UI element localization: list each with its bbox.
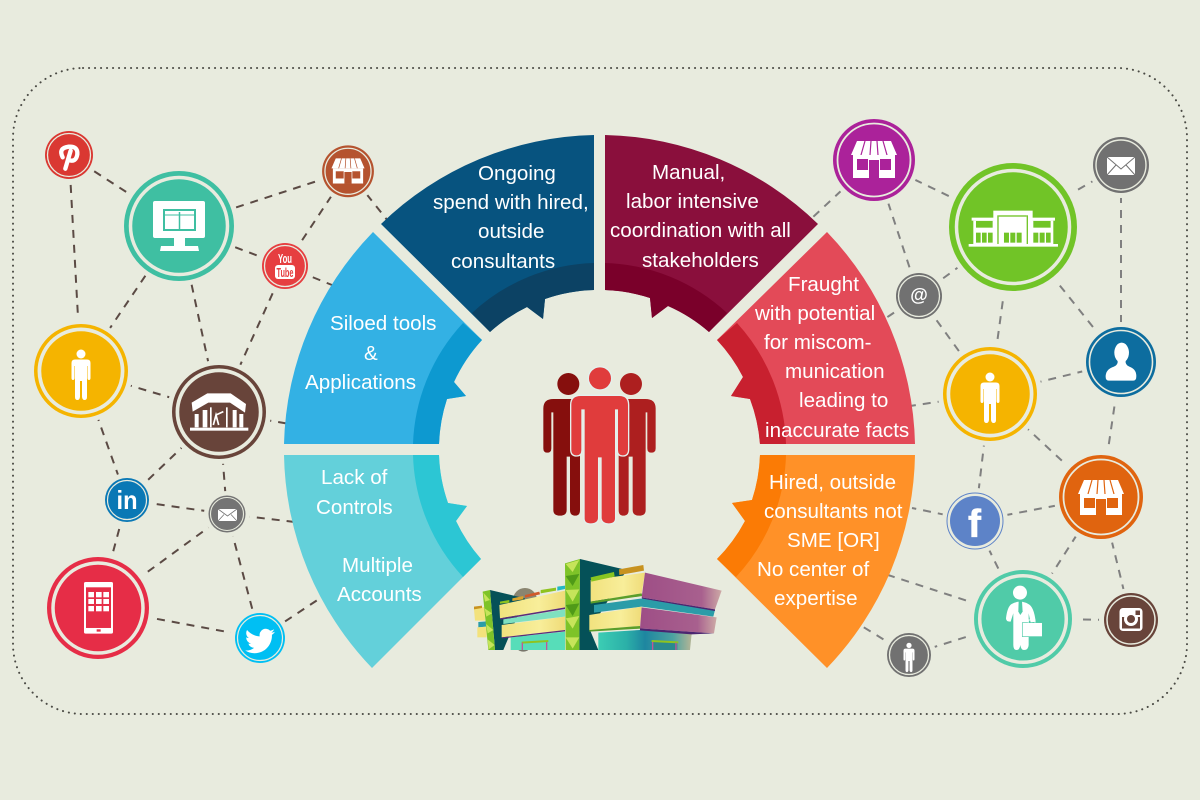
panel: ongoing spend: Ongoing: [478, 162, 556, 185]
icon: at sign: [896, 273, 942, 319]
panel: lack of controls: Accounts: [337, 583, 422, 606]
panel: hired outside consultants: No center of: [757, 558, 869, 581]
icon: person, yellow left: [34, 324, 128, 418]
icon: smartphone: [47, 557, 149, 659]
panel: manual coordination: stakeholders: [642, 249, 759, 272]
dotted rounded frame: [13, 68, 1187, 714]
icon: computer monitor: [124, 171, 234, 281]
icon: store, orange: [1059, 455, 1143, 539]
panel: hired outside consultants: consultants not: [764, 500, 903, 523]
icon: shopping mall, green: [949, 163, 1077, 291]
panel: siloed tools: &: [364, 342, 378, 365]
icon: pinterest: [45, 131, 93, 179]
panel: lack of controls: Controls: [316, 496, 393, 519]
icon: facebook: [947, 493, 1003, 549]
icon: store, purple: [833, 119, 915, 201]
panel: ongoing spend: [381, 135, 594, 332]
network connections: left: [69, 155, 392, 638]
icon: youtube: You: [278, 251, 292, 266]
panel: lack of controls: [284, 455, 481, 668]
panel: hired outside consultants: Hired, outside: [769, 471, 896, 494]
icon: person, small grey: [887, 633, 931, 677]
panel: manual coordination: labor intensive: [626, 190, 759, 213]
panel: ongoing spend: outside: [478, 220, 544, 243]
illustration: building: [474, 559, 722, 652]
icon: instagram: [1104, 593, 1158, 647]
icon: group of three people: [543, 367, 656, 524]
icon: twitter: [235, 613, 285, 663]
panel: manual coordination: [605, 135, 818, 332]
icon: bank building, brown: [172, 365, 266, 459]
panel: hired outside consultants: expertise: [774, 587, 858, 610]
icon: youtube: [262, 243, 308, 289]
panel: ongoing spend: consultants: [451, 250, 555, 273]
panel: siloed tools: Applications: [305, 371, 416, 394]
panel: ongoing spend: spend with hired,: [433, 191, 589, 214]
icon: mail, small left: [208, 496, 246, 532]
panel: fraught with potential: with potential: [754, 302, 875, 325]
panel: fraught with potential: leading to: [799, 389, 888, 412]
icon: linkedin: in: [116, 485, 138, 515]
icon: at sign: @: [910, 285, 928, 305]
panel: siloed tools: Siloed tools: [330, 312, 436, 335]
icon: businessman: [974, 570, 1072, 668]
icon: mail, right: [1093, 137, 1149, 193]
panel: hired outside consultants: [717, 455, 915, 668]
panel: fraught with potential: Fraught: [788, 273, 859, 296]
panel: siloed tools: [284, 232, 482, 444]
network connections: right: [812, 160, 1131, 655]
panel: fraught with potential: munication: [785, 360, 885, 383]
panel: hired outside consultants: SME [OR]: [787, 529, 880, 552]
icon: person, yellow right: [943, 347, 1037, 441]
icon: user bust, blue: [1086, 327, 1156, 397]
panel: lack of controls: Lack of: [321, 466, 388, 489]
icon: youtube: Tube: [276, 265, 294, 280]
icon: store, brown: [322, 145, 374, 197]
panel: manual coordination: coordination with all: [610, 219, 791, 242]
panel: lack of controls: Multiple: [342, 554, 413, 577]
panel: fraught with potential: inaccurate facts: [765, 419, 909, 442]
icon: linkedin: [105, 478, 149, 522]
panel: fraught with potential: [717, 232, 915, 444]
icon: facebook: f: [968, 503, 982, 546]
panel: manual coordination: Manual,: [652, 161, 725, 184]
panel: fraught with potential: for miscom-: [764, 331, 872, 354]
